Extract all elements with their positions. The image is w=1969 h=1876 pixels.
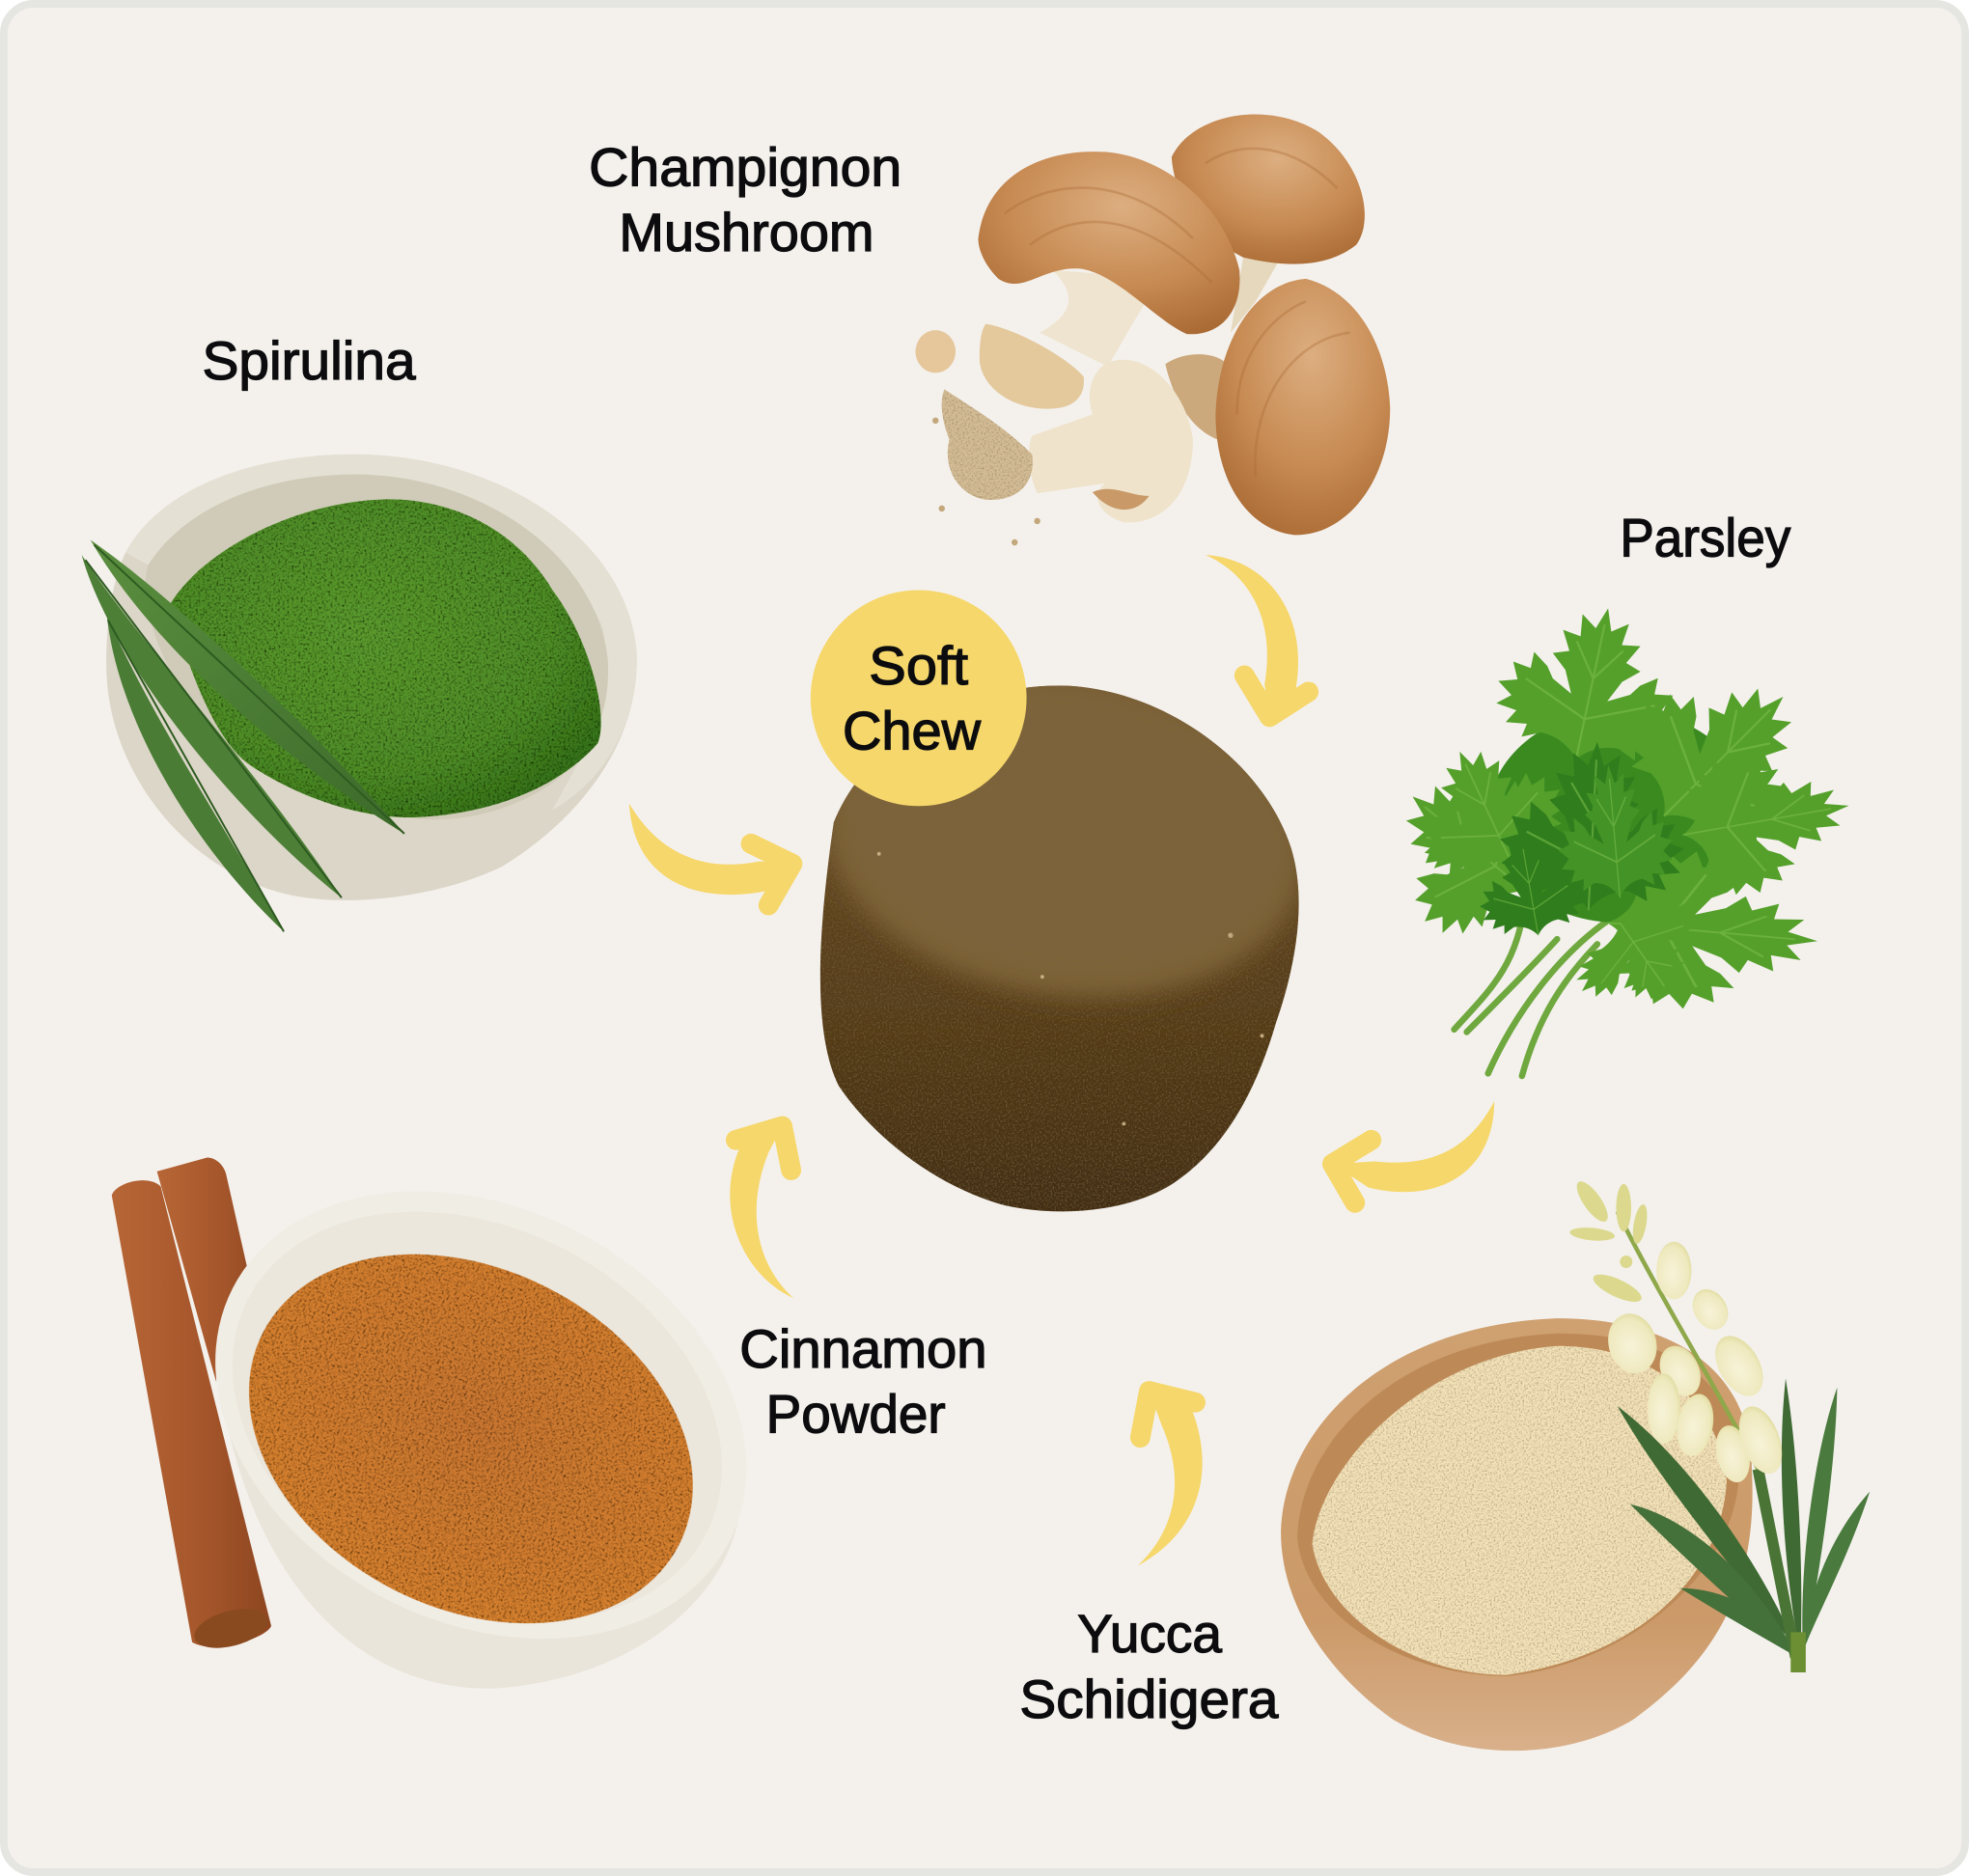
icon: parsley bunch: [1356, 589, 1861, 1076]
label: yucca schidigera: Yucca: [1077, 1603, 1223, 1664]
cinnamon sticks: [157, 1158, 270, 1381]
yucca powder: [1313, 1346, 1727, 1675]
badge: soft chew: [811, 590, 1027, 806]
cinnamon bowl body: [224, 1406, 742, 1689]
label: yucca schidigera: [1019, 1603, 1279, 1729]
label: champignon mushroom: Mushroom: [619, 202, 874, 262]
mushroom: large left cap and stem: [1040, 270, 1161, 367]
spirulina powder: [170, 499, 601, 817]
mushroom cap streaks: [1005, 149, 1350, 477]
label: champignon mushroom: Champignon: [589, 137, 901, 198]
arrow: yucca to chew: [1138, 1392, 1203, 1565]
icon: champignon mushrooms: [915, 115, 1390, 545]
badge: soft chew: Soft: [869, 635, 969, 696]
label: spirulina: Spirulina: [202, 330, 417, 391]
cinnamon powder: [186, 1182, 756, 1696]
mushroom: right cap: [1215, 279, 1390, 535]
label: champignon mushroom: [589, 137, 901, 262]
arrow: mushroom to chew: [1206, 555, 1309, 717]
yucca leaves: [1618, 1406, 1798, 1651]
mushroom powder: [942, 389, 1033, 500]
mushroom: rear cap and stem: [1231, 258, 1281, 333]
icon: cinnamon bowl with sticks: [112, 1104, 823, 1726]
nut piece: [915, 330, 956, 372]
arrow: spirulina to chew: [629, 804, 792, 905]
mushroom: cut piece: [980, 324, 1084, 409]
label: cinnamon powder: [739, 1318, 987, 1444]
arrow: cinnamon to chew: [730, 1126, 793, 1298]
parsley leaves: [1356, 589, 1861, 1035]
label: cinnamon powder: Cinnamon: [739, 1318, 987, 1379]
mushroom: small stem: [1165, 354, 1231, 442]
icon: yucca bowl and plant: [1281, 1177, 1870, 1751]
mushroom: halved: [1029, 360, 1193, 522]
yucca buds: [1569, 1177, 1650, 1308]
arrow: parsley to chew: [1332, 1101, 1494, 1202]
parsley stems: [1455, 904, 1614, 1076]
label: parsley: Parsley: [1620, 507, 1790, 567]
label: yucca schidigera: Schidigera: [1019, 1669, 1279, 1729]
wooden bowl: [1281, 1318, 1753, 1751]
icon: spirulina bowl with leaves: [82, 455, 637, 931]
label: cinnamon powder: Powder: [766, 1383, 946, 1444]
badge: soft chew: Chew: [843, 701, 982, 761]
icon: soft chew product: [820, 685, 1299, 1212]
yucca flower stem: [1618, 1211, 1758, 1469]
yucca flowers: [1601, 1242, 1790, 1485]
parsley leaf mass: [1488, 709, 1752, 923]
